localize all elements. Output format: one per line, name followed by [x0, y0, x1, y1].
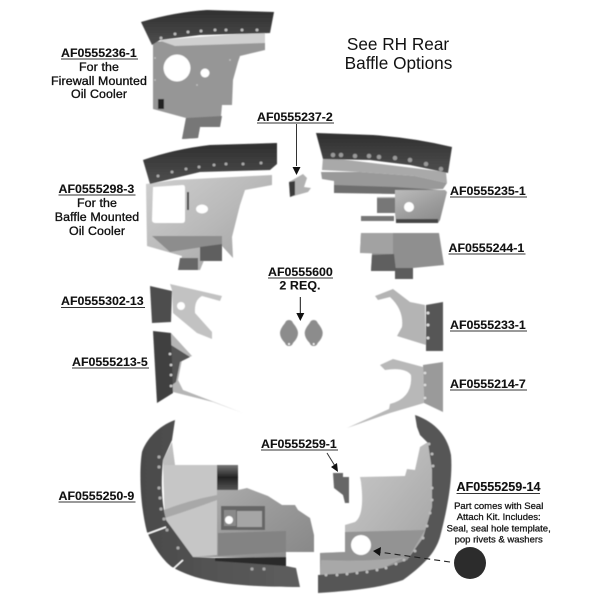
part: AF0555298-3 baffle mounted: [143, 143, 277, 270]
label: AF0555298-3: Baffle Mounted: [55, 210, 139, 224]
arrow: dashed seal pointer: [373, 547, 450, 562]
label: AF0555237-2: AF0555237-2: [257, 110, 333, 124]
icon: round seal: [454, 547, 486, 579]
label: AF0555600 2 REQ.: [268, 265, 333, 292]
label: AF0555235-1: AF0555235-1: [450, 184, 526, 198]
label: AF0555259-14: AF0555259-14: [456, 480, 541, 494]
label: AF0555600 2 REQ.: AF0555600: [268, 265, 333, 279]
label: AF0555244-1: AF0555244-1: [448, 241, 524, 255]
label: AF0555236-1: [51, 46, 147, 101]
heading: See RH Rear Baffle Options: See RH Rear: [347, 34, 449, 54]
label: AF0555298-3: [55, 182, 139, 238]
text: seal attach kit note: pop rivets & washers: [455, 534, 543, 546]
part: AF0555302-13: [150, 284, 222, 339]
label: AF0555259-1: AF0555259-1: [261, 437, 337, 451]
label: AF0555213-5: AF0555213-5: [72, 355, 148, 369]
label: AF0555236-1: Oil Cooler: [71, 87, 127, 101]
part: AF0555600 gaskets: [280, 320, 323, 346]
label: AF0555214-7: AF0555214-7: [450, 377, 526, 391]
text: seal attach kit note: [447, 501, 551, 546]
part: AF0555244-1: [360, 233, 444, 279]
part: AF0555213-5: [153, 331, 243, 413]
part: AF0555259-14: [318, 415, 451, 593]
part: AF0555250-9: [140, 420, 314, 587]
label: AF0555298-3: AF0555298-3: [58, 182, 134, 196]
label: AF0555298-3: For the: [77, 196, 117, 210]
text: seal attach kit note: Seal, seal hole template,: [447, 524, 551, 534]
label: AF0555250-9: AF0555250-9: [58, 489, 134, 503]
part: AF0555214-7: [347, 359, 443, 428]
arrow: to gaskets: [296, 297, 304, 321]
heading: See RH Rear Baffle Options: Baffle Options: [345, 53, 452, 73]
part: AF0555237-2 bracket: [289, 174, 311, 197]
part: AF0555259-1 small plate: [333, 473, 349, 503]
arrow: to bracket: [292, 124, 300, 175]
label: AF0555236-1: Firewall Mounted: [51, 74, 147, 88]
label: AF0555236-1: For the: [79, 60, 119, 74]
label: AF0555600 2 REQ.: 2 REQ.: [279, 278, 321, 292]
text: seal attach kit note: Part comes with Seal: [454, 501, 543, 512]
part: AF0555235-1: [316, 133, 452, 223]
label: AF0555298-3: Oil Cooler: [69, 224, 125, 238]
part: AF0555236-1 firewall baffle: [141, 10, 274, 139]
label: AF0555302-13: AF0555302-13: [61, 294, 144, 308]
arrow: to small plate: [327, 453, 338, 472]
text: seal attach kit note: Attach Kit. Includes:: [457, 512, 541, 523]
label: AF0555233-1: AF0555233-1: [450, 318, 526, 332]
heading: See RH Rear Baffle Options: [345, 34, 452, 73]
label: AF0555236-1: AF0555236-1: [61, 46, 137, 60]
part: AF0555233-1: [375, 289, 443, 351]
